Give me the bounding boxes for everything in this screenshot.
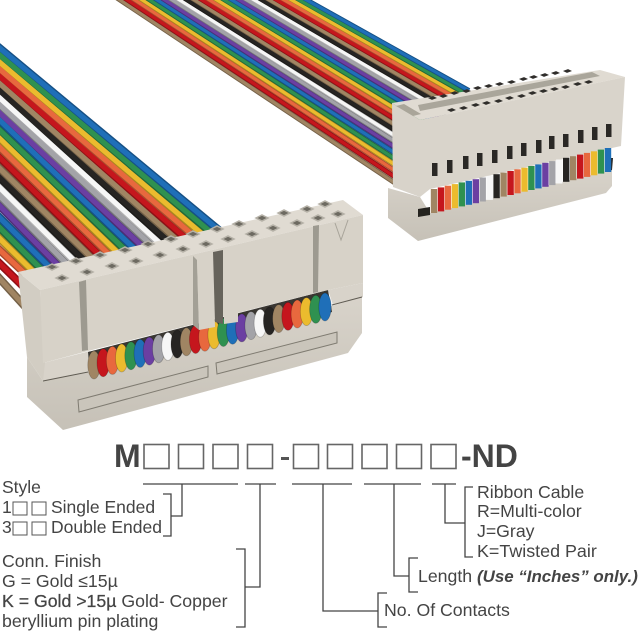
right key tab — [223, 250, 238, 324]
ribbon cable legend — [477, 482, 597, 561]
connector end recess — [396, 104, 421, 116]
ribbon cable legend: K=Twisted Pair — [477, 541, 597, 561]
ribbon cable legend: R=Multi-color — [477, 501, 582, 521]
ribbon cable legend: Ribbon Cable — [477, 482, 584, 502]
connector finish legend: G = Gold ≤15µ — [2, 571, 118, 591]
recess left — [78, 366, 208, 412]
connector top face — [18, 200, 363, 290]
code boxes — [144, 444, 456, 468]
left key tab — [197, 255, 215, 330]
connector left side — [392, 103, 420, 197]
connector finish legend: Conn. Finish — [2, 551, 101, 571]
length label: Length (Use “Inches” only.) — [418, 566, 638, 586]
groove right — [313, 225, 319, 293]
connector finish legend: beryllium pin plating — [2, 611, 158, 631]
style legend: Style — [2, 477, 41, 497]
dark key slot — [213, 250, 223, 324]
suffix ND: -ND — [461, 438, 518, 474]
style legend — [2, 477, 162, 537]
connector side ledge left — [43, 351, 90, 381]
connector top holes — [46, 201, 344, 281]
style legend: Single Ended — [51, 497, 155, 517]
connector lower body — [27, 297, 362, 430]
style legend: 3 — [2, 517, 12, 537]
left key tab side — [193, 256, 199, 330]
connector top holes — [429, 70, 592, 112]
connector finish legend — [2, 551, 228, 631]
connector dark openings — [418, 207, 430, 217]
connector side ledge right — [328, 283, 363, 305]
part number code — [114, 438, 518, 474]
connector wire strips — [434, 148, 608, 213]
connector front plate — [420, 77, 625, 197]
underlines and leader lines — [143, 484, 473, 627]
ribbon cable: rear — [111, 0, 469, 186]
connector top face — [392, 70, 625, 120]
style legend: 1 — [2, 497, 12, 517]
ribbon cable legend: J=Gray — [477, 521, 535, 541]
dash — [281, 457, 289, 460]
connector front slits — [432, 124, 612, 176]
cable rings — [88, 293, 331, 379]
connector long slot — [418, 72, 600, 111]
connector finish legend: K = Gold >15µ Gold- Copper — [2, 591, 228, 611]
connector dark opening right — [609, 158, 613, 171]
recess right — [216, 332, 337, 374]
connector upper front plate — [40, 215, 363, 363]
groove left — [79, 280, 88, 351]
connector: front left — [18, 200, 363, 430]
connector left face — [18, 272, 45, 381]
ribbon cable: front — [0, 40, 220, 312]
dark cable gap — [88, 290, 332, 374]
connector body lower — [388, 170, 612, 241]
number of contacts label: No. Of Contacts — [384, 600, 510, 620]
style legend: Double Ended — [51, 517, 162, 537]
triangle mark — [335, 220, 348, 240]
ledge shadow line — [43, 297, 362, 381]
prefix M: M — [114, 438, 141, 474]
connector: rear right — [388, 70, 625, 241]
